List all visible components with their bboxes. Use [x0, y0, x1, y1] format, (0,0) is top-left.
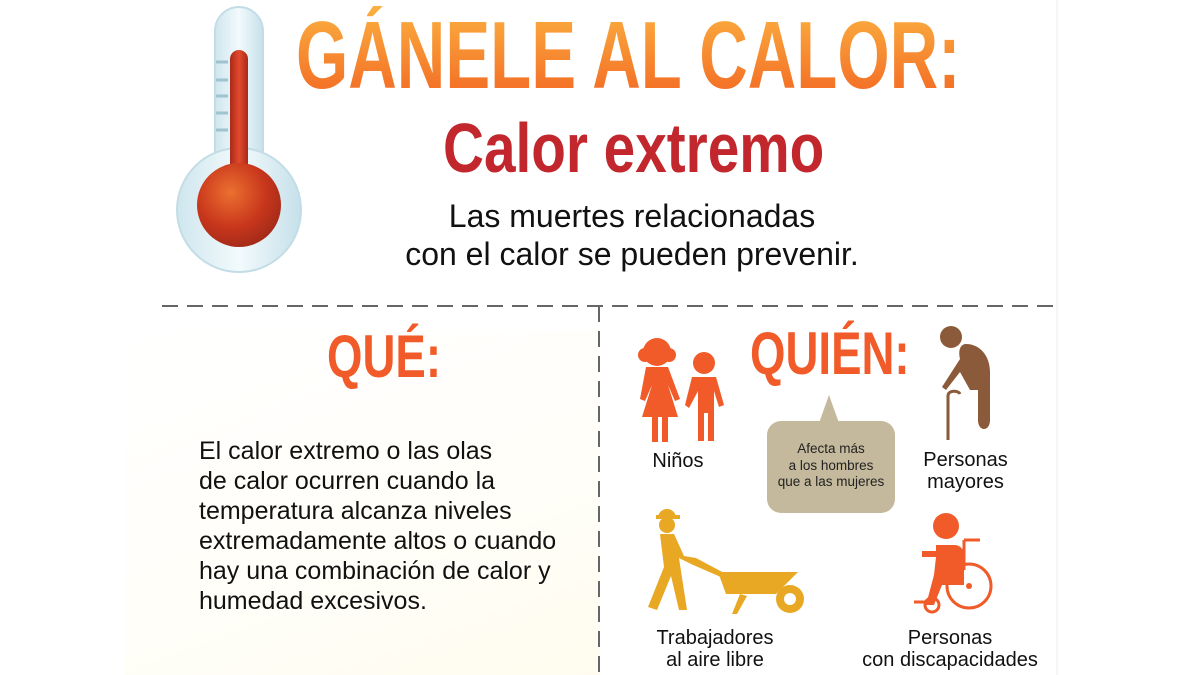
text: definition: humedad excesivos. — [199, 587, 427, 615]
label: Personas mayores: Personas — [923, 449, 1008, 471]
callout: men — [767, 395, 895, 513]
label: Personas con discapacidades: Personas — [908, 627, 992, 649]
tagline: con el calor se pueden prevenir. — [405, 236, 859, 272]
text: definition: temperatura alcanza niveles — [199, 497, 512, 525]
text: definition: extremadamente altos o cuando — [199, 527, 556, 555]
tagline: Las muertes relacionadas — [449, 198, 815, 234]
icon: children — [638, 338, 724, 442]
text: definition — [199, 437, 556, 615]
subtitle: Calor extremo: Calor extremo — [443, 109, 824, 187]
label: Personas mayores — [923, 449, 1008, 493]
icon: wheelchair — [914, 513, 992, 614]
title: GÁNELE AL CALOR: — [296, 2, 961, 109]
heading: QUÉ: QUÉ: — [327, 323, 441, 390]
text: definition: hay una combinación de calor y — [199, 557, 551, 585]
label: Personas mayores: mayores — [927, 471, 1004, 493]
tagline — [405, 198, 859, 272]
callout: men: a los hombres — [789, 458, 873, 472]
text: definition: de calor ocurren cuando la — [199, 467, 495, 495]
callout: men: Afecta más — [797, 441, 865, 456]
callout: men: que a las mujeres — [778, 474, 884, 489]
icon: elderly — [940, 326, 990, 440]
label: Personas con discapacidades: con discapacidades — [862, 649, 1038, 671]
background tint — [125, 330, 600, 675]
heading: QUIÉN: QUIÉN: — [750, 320, 910, 387]
label: Personas con discapacidades — [862, 627, 1038, 671]
text: definition: El calor extremo o las olas — [199, 437, 492, 465]
icon: thermometer — [176, 6, 302, 273]
label: Trabajadores al aire libre — [656, 627, 774, 671]
label: Trabajadores al aire libre: Trabajadores — [656, 627, 774, 649]
label: Trabajadores al aire libre: al aire libre — [666, 649, 764, 671]
label: Niños: Niños — [652, 450, 704, 472]
icon: worker with wheelbarrow — [648, 509, 804, 614]
